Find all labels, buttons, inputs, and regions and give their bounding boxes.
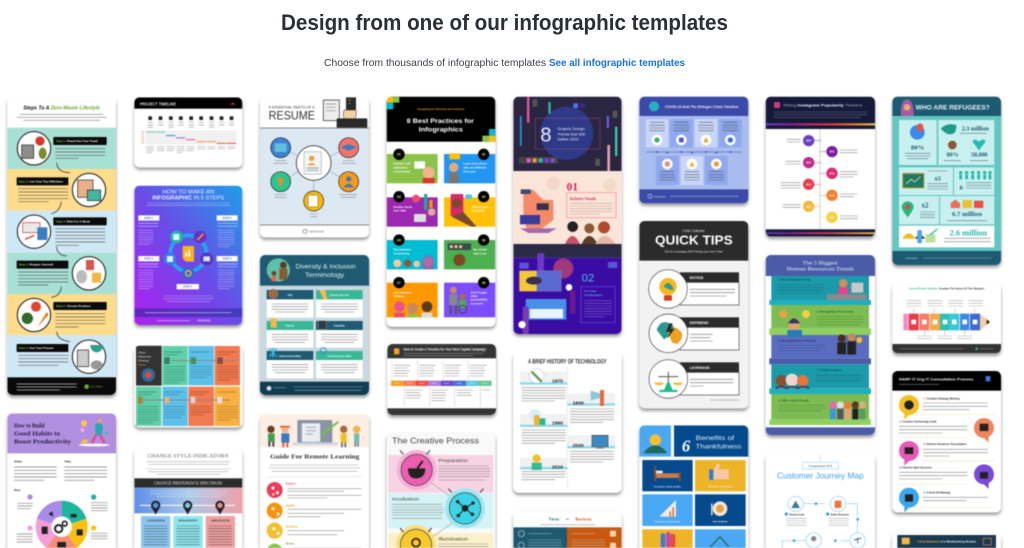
title: 8 <box>540 125 552 147</box>
tile illustrations <box>393 153 477 317</box>
header avatar <box>901 99 914 116</box>
step banners: Step 4: Prepare Yourself <box>19 263 53 267</box>
timeline entries: 2010 <box>552 464 563 470</box>
title: Define 2022 <box>557 137 580 142</box>
tile text: from you <box>463 169 476 173</box>
colored bars <box>520 97 617 171</box>
template: zero-waste lifestyle <box>7 97 116 395</box>
number badges: 05 <box>397 238 401 242</box>
tile text: language <box>472 209 485 213</box>
tile text: who are different <box>462 165 486 169</box>
phase icons <box>148 116 233 120</box>
timeline entries <box>520 369 615 470</box>
title: Good Habits to <box>14 430 60 437</box>
section 02: Visualisations <box>584 293 603 297</box>
grid cells <box>136 346 240 426</box>
timeline nodes: 2013 <box>829 173 835 175</box>
template: change style indicator <box>134 448 242 548</box>
tile text: Revisit your <box>472 205 489 209</box>
footer: VENNGAGE <box>653 195 666 198</box>
number badges: 02 <box>482 153 486 157</box>
title: 'Bacteria' <box>574 516 592 521</box>
timeline axis <box>818 129 822 229</box>
trend text: 1. Personalization Is Key <box>777 278 811 282</box>
stat icons <box>902 123 992 243</box>
footer band <box>134 308 242 317</box>
topic labels: Media <box>286 541 294 545</box>
node labels <box>273 161 357 217</box>
milestones <box>392 361 480 407</box>
venngage logo: VENNGAGE <box>309 229 324 233</box>
header illustration <box>267 258 290 282</box>
template: covid refugee timeline <box>639 97 748 203</box>
title: Steps To A Zero-Waste Lifestyle <box>23 105 100 111</box>
template: instagram popularity timeline <box>766 97 875 237</box>
section 01 <box>520 177 617 244</box>
template: it consultation process <box>892 371 1001 512</box>
number badges: 03 <box>397 195 401 199</box>
spectrum heading: CHANGE PREFERENCE SPECTRUM <box>154 482 223 486</box>
benefit tiles: Eat healthier <box>713 519 728 523</box>
title: COVID-19 And The Refugee Crisis Timeline <box>665 105 739 109</box>
what and why: What <box>14 460 23 464</box>
five-step ring <box>164 231 213 280</box>
topic labels: Games <box>286 482 296 486</box>
title <box>14 422 72 445</box>
title: Customer Journey Map <box>777 471 864 481</box>
journey flow <box>782 496 865 548</box>
corner blocks <box>387 97 495 142</box>
title <box>152 190 224 201</box>
title: The 5 Biggest <box>803 261 839 266</box>
template: best practices <box>387 97 495 327</box>
cell text <box>138 352 185 423</box>
tile text: Practice self <box>393 162 410 166</box>
tile text: Double-check <box>393 205 412 209</box>
step circles <box>17 132 106 373</box>
term cards: Emotional Tax <box>330 293 349 297</box>
template: history of technology <box>513 352 622 493</box>
title: QUICK TIPS <box>655 233 733 247</box>
timeline nodes: 2017 <box>829 217 835 219</box>
topic labels: Health <box>286 503 295 507</box>
task notes <box>146 147 235 153</box>
node icons <box>275 143 357 207</box>
template: who are refugees: VENNGAGE <box>905 257 918 260</box>
tile text: accessibility <box>471 298 488 302</box>
term cards: Equality <box>334 324 345 328</box>
tip rows: LEVERAGE <box>690 366 710 370</box>
title: A BRIEF HISTORY OF TECHNOLOGY <box>528 359 607 365</box>
colored bands <box>388 455 493 548</box>
header: Benefits of <box>696 435 735 442</box>
title: Client <box>138 350 146 354</box>
stat panels <box>899 120 994 224</box>
step text <box>138 223 238 267</box>
tile text: Use inclusive <box>393 290 412 294</box>
main heading: Design from one of our infographic templates <box>281 10 728 35</box>
section nodes <box>271 138 359 211</box>
pencil chart <box>903 301 990 339</box>
template: capital campaign timeline <box>387 344 496 415</box>
step labels <box>138 215 238 289</box>
number badges: 06 <box>482 238 486 242</box>
template: benefits of thankfulness <box>639 425 748 548</box>
subheading with link: See all infographic templates <box>549 57 685 69</box>
center node <box>296 146 331 180</box>
timeline entries: 1970 <box>552 378 563 384</box>
template: good habits productivity <box>7 413 116 548</box>
timeline entries: 1900 <box>573 400 584 406</box>
step banners: Step 5: Choose Produce <box>56 304 91 308</box>
timeline band <box>391 381 492 386</box>
number badges <box>393 149 489 288</box>
title <box>407 107 475 133</box>
topic labels: Reading <box>286 524 298 528</box>
title <box>540 125 585 147</box>
title: The Creative Process <box>392 435 480 445</box>
eyebrow label: Components Of A <box>809 464 832 468</box>
title: 4 Key Elements of a Mindbanking Module <box>917 540 976 544</box>
incubation icon <box>445 488 485 528</box>
title: Trends that Will <box>557 131 585 136</box>
title: PROJECT TIMELINE <box>140 101 176 106</box>
connector lines <box>290 152 340 194</box>
journey flow: Define Research <box>831 514 849 516</box>
tile text: Pay attention <box>393 248 411 252</box>
title: Strategy <box>138 358 150 362</box>
timeline nodes <box>781 135 858 223</box>
template: resume <box>260 97 369 237</box>
gantt chart <box>141 131 236 144</box>
number badges: 08 <box>482 281 486 285</box>
page header <box>281 10 728 69</box>
title: Boost Productivity <box>14 438 72 445</box>
tiles <box>387 154 495 317</box>
stat numbers <box>911 126 989 237</box>
benefit tiles <box>642 460 746 548</box>
template: olympics pencil timeline <box>892 283 1001 353</box>
step banners: Step 1: Check Out Your Trash <box>56 139 98 143</box>
title: How to Build <box>14 422 45 429</box>
timeline nodes: 2016 <box>806 206 812 208</box>
tile text: awareness <box>393 165 408 169</box>
step labels: STEP 3 <box>183 285 193 289</box>
template: customer journey map <box>766 453 875 548</box>
journey flow: Review Goals <box>789 514 805 516</box>
timeline nodes: 2011 <box>829 152 835 154</box>
stat captions <box>905 133 991 242</box>
title: Guide For Remote Learning <box>270 455 359 461</box>
stage text <box>392 458 490 547</box>
title: Graphic Design <box>557 126 585 131</box>
title: Designing for Diversity and Inclusion <box>418 107 465 111</box>
template: project timeline <box>134 97 242 167</box>
people illustrations <box>776 279 867 419</box>
tile text: Don't forget <box>471 290 487 294</box>
step labels: STEP 2 <box>144 257 154 261</box>
process text: 04 Perform Q&A Sessions <box>899 465 932 469</box>
header: 6 <box>682 436 691 455</box>
header: Thankfulness <box>696 443 742 450</box>
trend text: 4. People Analytics <box>817 368 843 372</box>
tile text: concerns <box>471 301 484 305</box>
stat numbers: 2.6 million <box>950 228 987 237</box>
tile text: imagery <box>393 294 405 298</box>
timeline entries: 2000 <box>573 443 584 449</box>
comparison panels <box>513 527 622 548</box>
what and why <box>14 460 107 492</box>
illumination icon <box>396 525 436 548</box>
columns 4 and 5 <box>387 97 622 548</box>
title: Marketing <box>138 354 151 358</box>
spectrum band <box>134 488 242 515</box>
trend text <box>777 278 854 402</box>
process bubbles <box>899 395 994 512</box>
step labels: STEP 4 <box>222 257 232 261</box>
step banners <box>17 137 107 352</box>
stat numbers: x5 <box>934 175 942 182</box>
title <box>655 229 733 254</box>
title: Human Resources Trends <box>787 267 854 272</box>
title: Diversity & Inclusion <box>296 265 356 271</box>
header <box>639 425 748 457</box>
entry text <box>522 388 614 480</box>
section 01: Inclusive Visuals <box>570 197 596 201</box>
stat numbers: 2.3 million <box>962 126 989 132</box>
stat numbers: 6 <box>960 185 964 192</box>
title: School Project Timeline: Visualize The History Of The Olympics <box>909 287 985 290</box>
columns 1 to 3 <box>7 97 369 548</box>
title: Workflow <box>138 363 147 366</box>
what and why: How <box>14 488 21 492</box>
title: Critic Catcher <box>683 229 706 233</box>
title <box>296 265 356 279</box>
style columns: ORIGINATOR <box>211 519 231 523</box>
template: how to make an infographic <box>134 186 242 325</box>
step banners: Step 6: Use Your Freezer <box>19 346 55 350</box>
style columns: PRAGMATIST <box>179 519 198 523</box>
tile text: your data <box>393 209 406 213</box>
timeline nodes: 2012 <box>806 163 812 165</box>
topic icons <box>267 482 283 548</box>
title: 8 Best Practices for <box>407 118 475 125</box>
title: RESUME <box>269 108 315 122</box>
section 02 <box>518 253 617 334</box>
term cards: Unconscious Bias <box>327 354 352 358</box>
trend text: 3. Development as a Service <box>778 339 817 343</box>
tile text: Be careful <box>473 248 487 252</box>
template: diversity terminology <box>260 255 369 395</box>
template: human resources trends <box>766 255 875 435</box>
trend text: 5. GIR Is About People <box>778 398 809 402</box>
tip rows: DEFRIEND <box>690 321 709 325</box>
columns 6 to 8 <box>639 97 1001 548</box>
title <box>138 350 151 366</box>
process text: 03 Perform Solutions Presentation <box>923 442 967 446</box>
cell arrows and icons <box>138 357 237 404</box>
number badges: 07 <box>397 281 401 285</box>
palette <box>519 157 558 164</box>
template: client marketing strategy <box>134 346 242 427</box>
briefcase illustration <box>323 97 367 129</box>
tip rows: NOTICE <box>690 276 704 280</box>
preparation icon <box>397 450 437 490</box>
title: Terminology <box>305 273 344 279</box>
what and why: Why <box>64 460 72 464</box>
title <box>787 261 854 272</box>
section 02: 02 <box>582 273 594 285</box>
step body text <box>18 149 105 365</box>
number badges: 01 <box>397 153 401 157</box>
template: remote learning guide <box>260 414 369 548</box>
title <box>548 516 592 521</box>
template: the creative process <box>387 433 495 548</box>
template: virus vs bacteria <box>513 512 622 548</box>
style columns <box>141 516 235 548</box>
template: who are refugees <box>892 97 1001 265</box>
stage text: Preparation <box>438 458 469 463</box>
process text <box>899 396 967 494</box>
title: HARP IT Org IT Consultation Process <box>899 378 973 382</box>
title: vs <box>566 517 570 521</box>
runner illustration <box>79 418 109 446</box>
title: Infographics <box>419 126 463 133</box>
step labels: STEP 5 <box>222 216 232 220</box>
process text: 05 A Kick-Off Meeting <box>923 490 951 494</box>
title: CHANGE STYLE INDICATOR® <box>147 452 230 459</box>
title: Rising Instagram Popularity Timeline <box>783 103 862 107</box>
timeline nodes: 2014 <box>806 183 812 186</box>
template: zero-waste lifestyle: Zero Waste <box>91 386 103 389</box>
process text: 01 Conduct Strategy Meeting <box>923 396 960 400</box>
tip rows <box>649 270 739 398</box>
tile text: Learn from those <box>463 162 487 166</box>
template: how to make an infographic: VENNGAGE <box>197 320 211 323</box>
template: quick tips: Source: www.openparenting.net <box>711 398 740 401</box>
title: HOW TO MAKE AN <box>162 190 214 196</box>
title: 5 ESSENTIAL PARTS OF A <box>269 105 315 109</box>
trend text: 2. Recognizing Trust Issues <box>817 310 854 314</box>
timeline cards <box>646 119 742 185</box>
benefit tiles: Reduces depression <box>708 485 733 489</box>
cycle diagram <box>17 494 108 548</box>
stat numbers: 80% <box>911 144 925 151</box>
term cards: Intersectionality <box>279 354 301 358</box>
tile text: to hierarchy <box>393 251 410 255</box>
topic labels <box>286 482 298 545</box>
template: quick tips <box>639 221 748 408</box>
number badges: 04 <box>482 195 486 199</box>
style columns: CONSERVER <box>147 519 165 523</box>
stage text: Incubation <box>392 497 420 502</box>
term cards: Ally <box>287 293 293 297</box>
title: INFOGRAPHIC IN 5 STEPS <box>152 195 224 201</box>
title: Tips for Leveraging (NOT Firing) your Inner Critic! <box>665 250 723 254</box>
timeline nodes: 2015 <box>829 195 835 197</box>
template: graphic design trends <box>513 97 622 334</box>
title: How to Create a Timeline for Your Next Capital Campaign <box>403 347 486 351</box>
term cards: Equity <box>286 324 295 328</box>
stat numbers: 50,000 <box>971 153 988 159</box>
step banners: Step 2: List Your Top Offenders <box>19 179 63 183</box>
step labels: STEP 1 <box>144 216 154 220</box>
timeline nodes: 2010 <box>806 141 812 143</box>
stat numbers: 6.7 million <box>952 211 982 218</box>
title: WHO ARE REFUGEES? <box>916 104 990 111</box>
stat numbers: x2 <box>922 201 929 209</box>
subheading with link <box>324 57 685 69</box>
footer <box>17 384 77 390</box>
shelves <box>766 276 875 435</box>
tile text <box>393 162 489 305</box>
benefit tiles: Increases productivity <box>654 519 681 523</box>
tile text: other <box>471 294 479 298</box>
children and laptop illustration <box>267 420 360 447</box>
stat numbers: 80% <box>947 153 959 159</box>
term cards <box>267 289 363 378</box>
title: 'Virus' <box>548 516 560 521</box>
tile text: consistently <box>393 169 410 173</box>
step banners: Step 3: Plan For A Week <box>56 219 90 223</box>
section 01: 01 <box>567 182 578 194</box>
footer <box>923 257 992 259</box>
step icons <box>22 136 103 370</box>
section 02: Fun Data <box>584 289 597 293</box>
template: mindbanking module <box>892 533 1001 548</box>
footer <box>273 387 363 390</box>
benefit tiles: Increases sleep quality <box>654 485 682 489</box>
tile text: with color <box>472 251 488 255</box>
stage text: Illumination <box>438 536 469 541</box>
process text: 02 Conduct Technology Audit <box>899 419 936 423</box>
subheading with link: Choose from thousands of infographic templates <box>324 57 546 69</box>
timeline entries: 1990 <box>552 421 563 427</box>
